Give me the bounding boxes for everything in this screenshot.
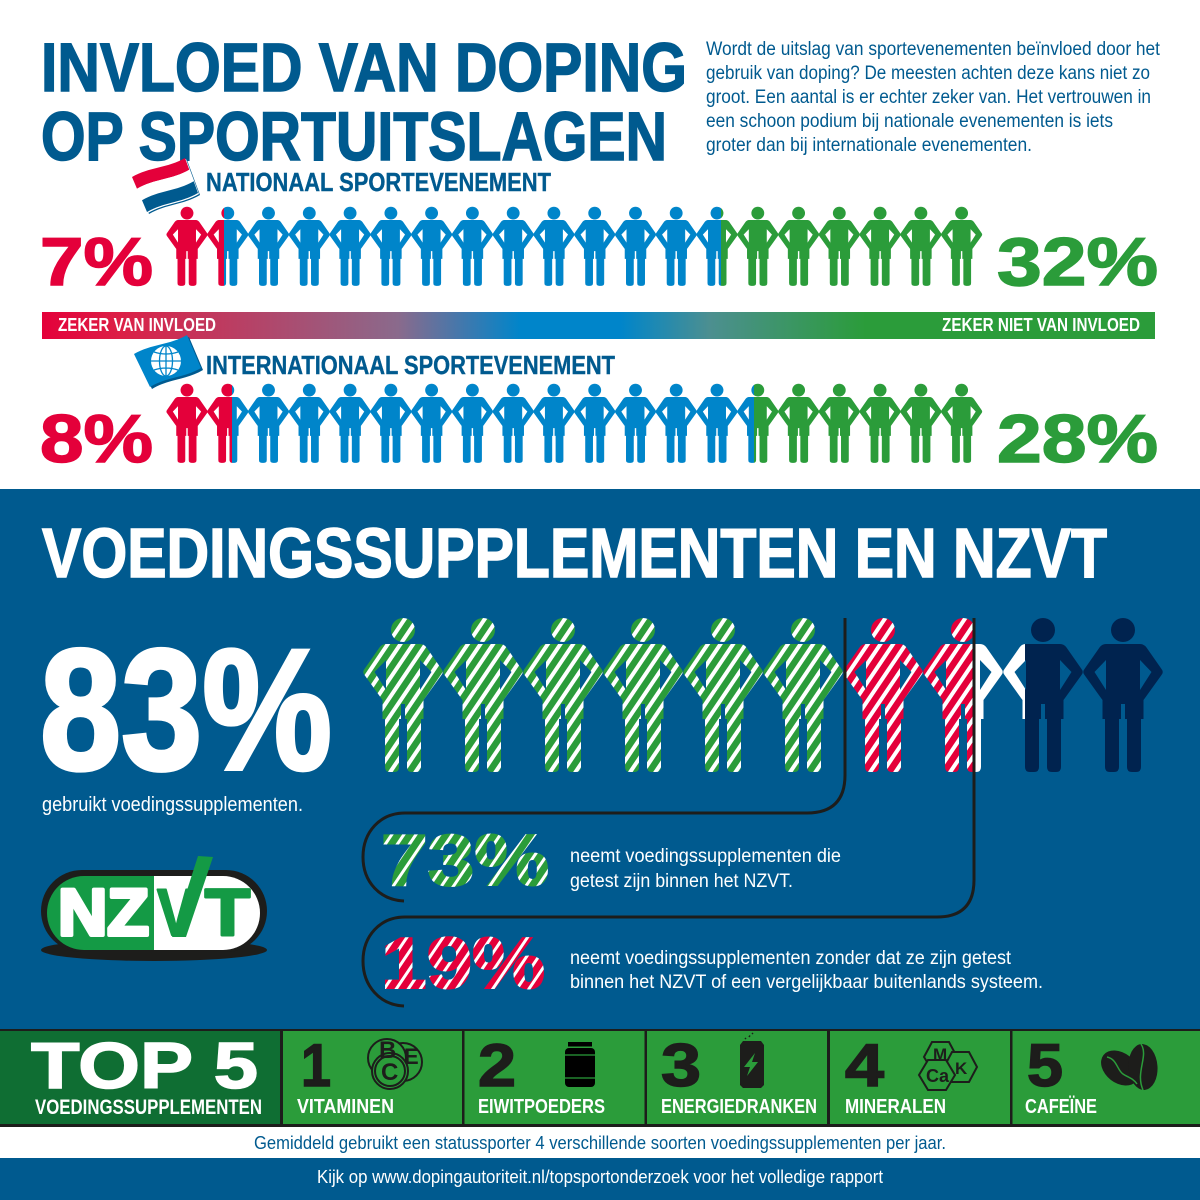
item 5: cafeine: 5 [1027, 1032, 1063, 1099]
panel: top 5 band [0, 1029, 1200, 1127]
intro text block: gebruik van doping? De meesten achten deze kans niet zo [706, 63, 1150, 84]
scale bar: ZEKER NIET VAN INVLOED [942, 315, 1140, 335]
item 4: mineralen: 4 [845, 1032, 885, 1099]
icon: globe flag [134, 335, 203, 389]
heading: top 5: VOEDINGSSUPPLEMENTEN [35, 1096, 262, 1119]
icon: coffee beans [1094, 1043, 1159, 1093]
pictogram row: nationaal [167, 207, 982, 286]
heading: top 5 [31, 1029, 262, 1119]
item 1: vitaminen: 1 [301, 1032, 331, 1099]
pictogram row: supplement users [363, 618, 1163, 772]
icon: vitamin coins: C [381, 1059, 398, 1086]
panel: voedingssupplementen background [0, 489, 1200, 1029]
footer band [0, 1158, 1200, 1200]
stat: 7% zeker van invloed nationaal: 7% [40, 224, 153, 300]
heading: internationaal: INTERNATIONAAL SPORTEVENEMENT [206, 350, 615, 380]
icon: mineral hexagons: Ca [926, 1066, 950, 1086]
item 3: energiedranken: 3 [661, 1032, 701, 1099]
intro text block: een schoon podium bij nationale evenementen is iets [706, 111, 1113, 132]
icon: protein jar [565, 1042, 595, 1087]
item 5: cafeine: CAFEÏNE [1025, 1095, 1097, 1118]
connector line: 73% [363, 618, 845, 901]
text: 73% description: getest zijn binnen het NZVT. [570, 871, 793, 892]
intro text block: Wordt de uitslag van sportevenementen beïnvloed door het [706, 39, 1161, 60]
stat: 19%: 19% [381, 924, 545, 1004]
stat: 32% zeker niet van invloed nationaal: 32% [997, 224, 1158, 300]
heading: top 5: TOP 5 [31, 1029, 258, 1102]
item 3: energiedranken [661, 1032, 817, 1118]
text: 19% description: binnen het NZVT of een vergelijkbaar buitenlands systeem. [570, 972, 1043, 993]
icon: mineral hexagons: M [933, 1045, 947, 1064]
connector line: 19% [363, 618, 974, 1006]
logo: NZVT pill [41, 856, 267, 961]
item 1: vitaminen [297, 1032, 422, 1118]
item 4: mineralen [845, 1032, 977, 1118]
item 2: eiwitpoeders [478, 1032, 605, 1118]
icon: energy can [740, 1033, 764, 1088]
logo: NZVT pill: NZ [58, 875, 149, 949]
heading: nationaal: NATIONAAL SPORTEVENEMENT [206, 167, 551, 197]
text: 19% description: neemt voedingssupplementen zonder dat ze zijn getest [570, 948, 1012, 969]
logo: NZVT pill: V [157, 875, 195, 949]
title [41, 29, 687, 175]
intro text block [706, 39, 1161, 156]
icon: Dutch flag [132, 158, 200, 214]
item 2: eiwitpoeders: 2 [478, 1032, 516, 1099]
icon: vitamin coins: B [379, 1037, 396, 1064]
text: 73% description: neemt voedingssupplementen die [570, 846, 841, 867]
item 2: eiwitpoeders: EIWITPOEDERS [478, 1096, 605, 1118]
icon: vitamin coins: E [404, 1044, 419, 1069]
text: 19% description [570, 948, 1043, 993]
intro text block: groot. Een aantal is er echter zeker van. Het vertrouwen in [706, 87, 1151, 108]
icon: mineral hexagons: K [955, 1059, 968, 1078]
stat: 28% zeker niet van invloed internationaal: 28% [997, 401, 1158, 477]
item 1: vitaminen: VITAMINEN [297, 1096, 394, 1118]
item 3: energiedranken: ENERGIEDRANKEN [661, 1096, 817, 1118]
stat: 83%: 83% [40, 614, 332, 806]
item 5: cafeine [1025, 1032, 1159, 1118]
logo: NZVT pill: T [205, 875, 250, 949]
footer band: Kijk op www.dopingautoriteit.nl/topsportonderzoek voor het volledige rapport [317, 1167, 883, 1187]
caption: 83%: gebruikt voedingssupplementen. [42, 794, 303, 816]
footnote: Gemiddeld gebruikt een statussporter 4 verschillende soorten voedingssupplementen per jaar. [254, 1133, 946, 1153]
pictogram row: internationaal [167, 384, 982, 463]
stat: 8% zeker van invloed internationaal: 8% [40, 401, 153, 477]
stat: 73%: 73% [381, 821, 549, 901]
item 4: mineralen: MINERALEN [845, 1096, 946, 1118]
icon: vitamin coins [368, 1037, 422, 1089]
title: INVLOED VAN DOPING [41, 29, 687, 106]
scale bar [42, 312, 1155, 339]
scale bar: ZEKER VAN INVLOED [58, 315, 216, 335]
text: 73% description [570, 846, 841, 892]
intro text block: groter dan bij internationale evenementen. [706, 135, 1032, 156]
icon: mineral hexagons [919, 1042, 977, 1090]
title: OP SPORTUITSLAGEN [41, 98, 667, 175]
